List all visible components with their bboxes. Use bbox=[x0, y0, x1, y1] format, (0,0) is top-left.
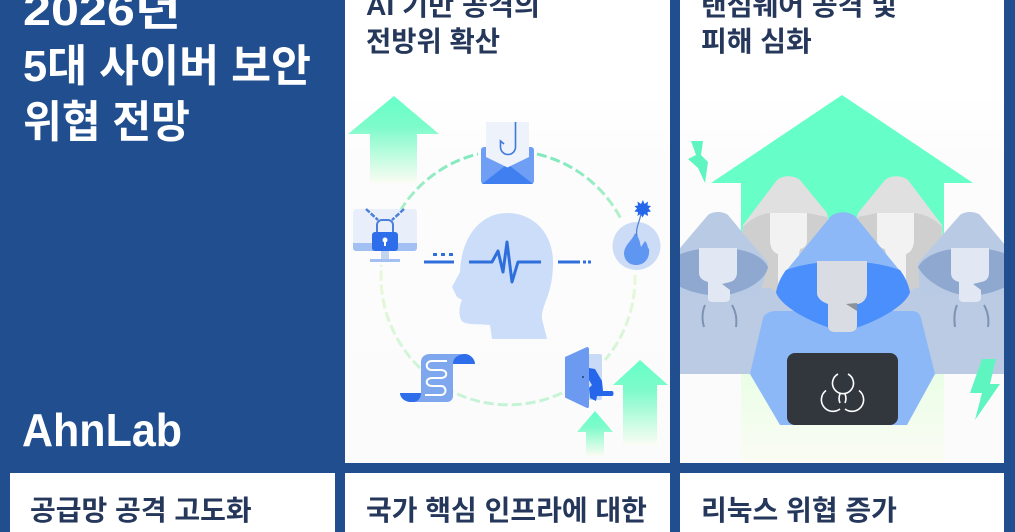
arrow: large house-shaped bbox=[711, 95, 973, 463]
heading: national infrastructure: 국가 핵심 인프라에 대한 bbox=[366, 495, 647, 526]
heading: AI attacks: 전방위 확산 bbox=[366, 26, 500, 57]
attacker: face shadow bbox=[846, 303, 857, 311]
dashed ring bbox=[381, 154, 635, 405]
attackers body band bbox=[680, 288, 1004, 374]
icon: open door bbox=[565, 347, 614, 408]
attacker: main hood inner bbox=[776, 261, 910, 332]
heading: AI attacks bbox=[366, 0, 540, 57]
attacker: main body bbox=[750, 311, 935, 425]
heading: supply chain: 공급망 공격 고도화 bbox=[30, 495, 252, 526]
icon: biohazard bbox=[821, 374, 864, 411]
attacker: rear right bbox=[856, 176, 943, 292]
icon: pulse line bbox=[424, 242, 591, 282]
panel: ransomware bbox=[680, 0, 1004, 463]
panel: national infrastructure bbox=[345, 473, 670, 532]
arrow: large left bbox=[348, 96, 439, 183]
icon: lightning right bbox=[970, 359, 1000, 420]
attacker: main hood bbox=[787, 212, 899, 270]
illustration: hooded attackers bbox=[680, 176, 1004, 425]
icon: lightning left bbox=[688, 141, 708, 183]
heading: ransomware bbox=[701, 0, 897, 57]
attacker: front left bbox=[680, 212, 768, 328]
arrow: small bbox=[577, 411, 613, 456]
panel: linux bbox=[680, 473, 1004, 532]
panel: title bbox=[22, 0, 311, 456]
icon: bomb bbox=[612, 200, 660, 270]
panel: AI attacks bbox=[345, 0, 670, 463]
attacker: main face bbox=[817, 261, 867, 332]
heading: main title bbox=[23, 0, 311, 147]
icon: locked monitor bbox=[353, 209, 417, 262]
logo: AhnLab: AhnLab bbox=[22, 404, 182, 456]
icon: script scroll bbox=[400, 354, 475, 402]
icon: phishing email bbox=[481, 122, 534, 184]
arrow: large right bbox=[613, 360, 668, 445]
panel: supply chain bbox=[10, 473, 335, 532]
attacker: rear left bbox=[742, 176, 828, 292]
laptop bbox=[787, 353, 898, 425]
attacker: front right bbox=[918, 212, 1004, 328]
heading: ransomware: 피해 심화 bbox=[701, 26, 812, 57]
heading: main title: 5대 사이버 보안 bbox=[23, 42, 311, 91]
icon: AI head bbox=[452, 213, 553, 339]
heading: linux: 리눅스 위협 증가 bbox=[701, 495, 897, 526]
heading: main title: 위협 전망 bbox=[23, 98, 190, 147]
